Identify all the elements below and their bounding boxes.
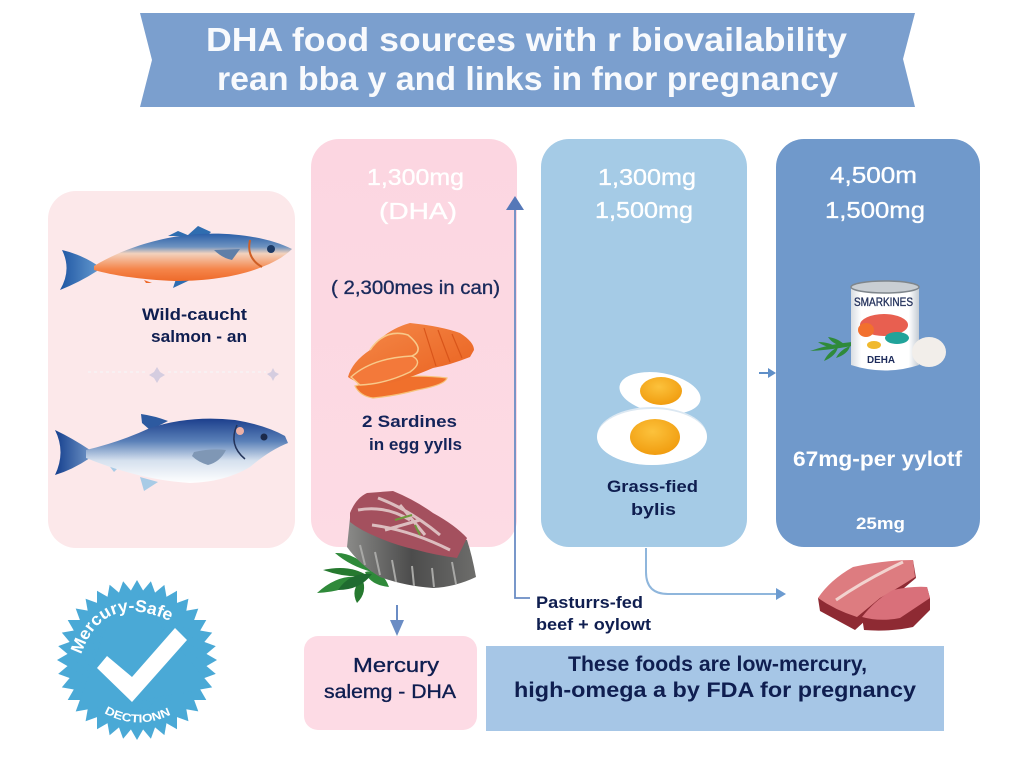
callout: mercury xyxy=(304,636,477,730)
icon: fish steak with herbs xyxy=(317,491,476,603)
label: pasture-fed beef: Pasturrs-fed xyxy=(536,593,643,612)
panel 4 amounts xyxy=(825,162,925,223)
panel 2 DHA amount xyxy=(367,164,464,224)
icon: sardine can: SMARKINES xyxy=(854,295,913,309)
panel 2 DHA amount: (DHA) xyxy=(379,198,457,224)
panel 4 yolk DHA value: 67mg-per yylotf xyxy=(793,448,963,471)
icon: beef steaks xyxy=(818,560,930,631)
panel: sardines xyxy=(311,139,517,547)
label: sardines in egg yolks: 2 Sardines xyxy=(362,413,457,431)
arrow: up to panel 2 xyxy=(506,196,530,598)
arrow: to canned panel xyxy=(759,368,776,378)
label: wild-caught salmon: salmon - an xyxy=(151,328,247,346)
panel 2 serving note: ( 2,300mes in can) xyxy=(331,278,500,299)
label: grass-fed xyxy=(607,477,698,519)
callout: low-mercury note xyxy=(486,646,944,731)
callout: low-mercury note: These foods are low-mercury, xyxy=(568,653,867,676)
badge: mercury-safe xyxy=(57,580,217,740)
icon: salmon fish xyxy=(60,226,292,290)
panel: canned sardines xyxy=(776,139,980,547)
panel 2 DHA amount: 1,300mg xyxy=(367,164,464,190)
title text: rean bba y and links in fnor pregnancy xyxy=(217,60,839,97)
icon: silver fish xyxy=(55,414,288,491)
callout: low-mercury note: high-omega a by FDA for pregnancy xyxy=(514,679,916,702)
icon: check mark xyxy=(97,628,187,702)
label: wild-caught salmon xyxy=(142,306,248,346)
panel 4 amounts: 4,500m xyxy=(830,162,917,188)
label: pasture-fed beef: beef + oylowt xyxy=(536,615,651,634)
panel: eggs xyxy=(541,139,747,547)
icon: fried eggs xyxy=(597,366,707,465)
badge text xyxy=(70,600,172,722)
title banner xyxy=(140,13,915,107)
panel 3 amounts xyxy=(595,164,696,223)
label: grass-fed: bylis xyxy=(631,500,676,519)
badge text: DECTIONN xyxy=(104,706,170,722)
divider sparkles xyxy=(88,367,279,383)
panel 4 beef DHA value: 25mg xyxy=(856,515,905,533)
icon: sardine can xyxy=(810,281,946,370)
title text: DHA food sources with r biovailability xyxy=(206,21,848,58)
panel 3 amounts: 1,300mg xyxy=(598,164,696,190)
label: grass-fed: Grass-fied xyxy=(607,477,698,496)
callout: mercury: salemg - DHA xyxy=(324,682,456,703)
label: sardines in egg yolks: in egg yylls xyxy=(369,436,462,454)
icon: sardine can: DEHA xyxy=(867,355,895,366)
title text xyxy=(206,21,848,97)
label: sardines in egg yolks xyxy=(362,413,462,454)
panel: wild salmon xyxy=(48,191,295,548)
arrow: eggs to beef xyxy=(646,548,786,600)
label: pasture-fed beef xyxy=(536,593,651,634)
badge text: Mercury-Safe xyxy=(70,600,172,654)
label: wild-caught salmon: Wild-caucht xyxy=(142,306,248,324)
panel 3 amounts: 1,500mg xyxy=(595,197,693,223)
icon: salmon slices xyxy=(348,323,474,398)
panel 4 amounts: 1,500mg xyxy=(825,197,925,223)
callout: mercury: Mercury xyxy=(353,655,439,677)
arrow: down to mercury box xyxy=(390,605,404,636)
